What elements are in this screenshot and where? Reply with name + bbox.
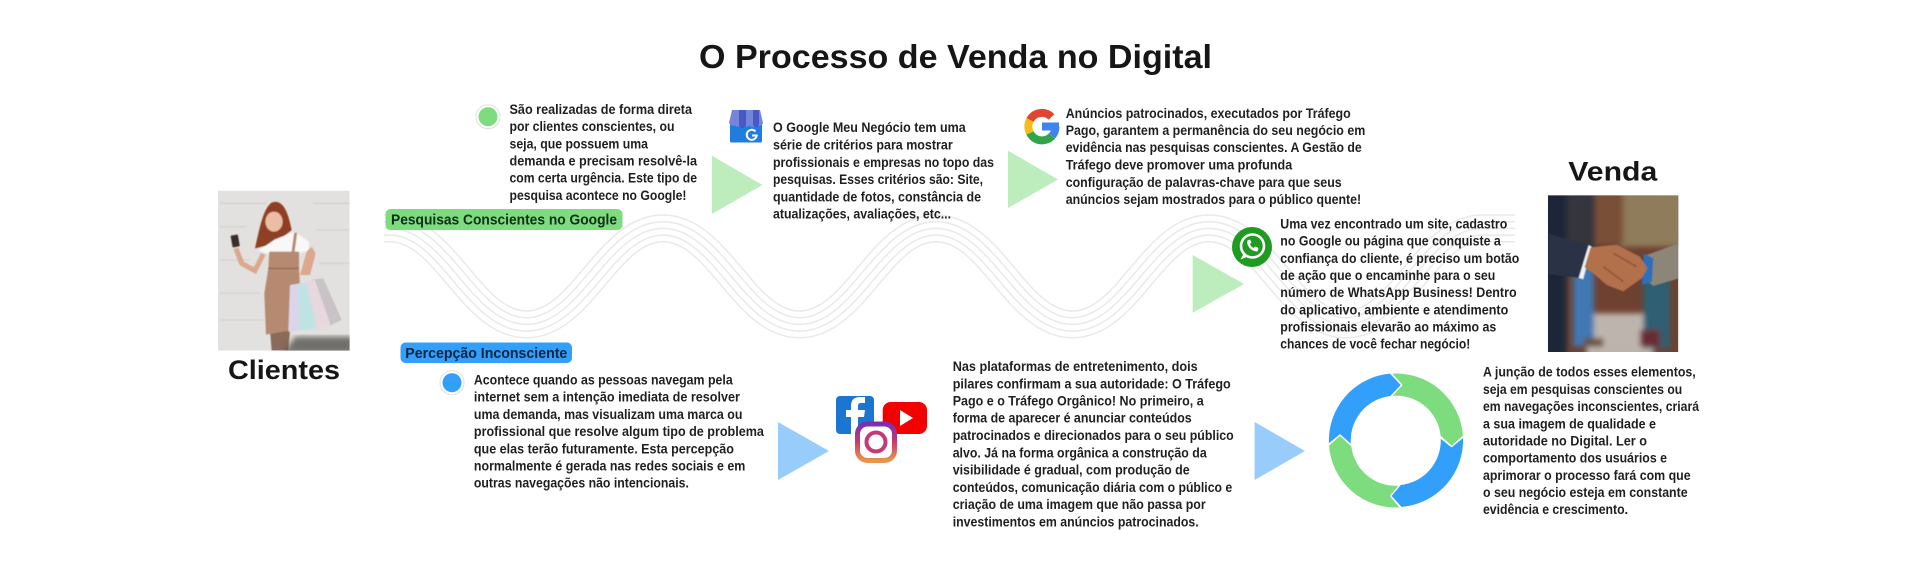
text: conclusion: em navegações inconscientes, criará bbox=[1483, 399, 1699, 414]
photo: handshake bbox=[1548, 195, 1678, 352]
text: entertainment platforms: criação de uma imagem que não passa por bbox=[953, 497, 1206, 512]
text: conclusion: a sua imagem de qualidade e bbox=[1483, 416, 1656, 431]
text: Google My Business: profissionais e empresas no topo das bbox=[773, 155, 994, 170]
text: direct searches: pesquisa acontece no Google! bbox=[510, 188, 686, 203]
text: Google My Business bbox=[773, 120, 994, 222]
text: conclusion: o seu negócio esteja em constante bbox=[1483, 485, 1688, 500]
text: conclusion bbox=[1483, 365, 1699, 517]
text: entertainment platforms: alvo. Já na forma orgânica a construção da bbox=[953, 445, 1207, 460]
text: entertainment platforms: visibilidade é gradual, com produção de bbox=[953, 462, 1190, 478]
text: paid ads bbox=[1066, 106, 1365, 207]
text: WhatsApp: confiança do cliente, é preciso um botão bbox=[1280, 251, 1519, 266]
text: direct searches: por clientes conscientes, ou bbox=[510, 119, 674, 134]
text: WhatsApp: número de WhatsApp Business! Dentro bbox=[1280, 285, 1517, 300]
text: direct searches: seja, que possuem uma bbox=[510, 136, 648, 151]
text: entertainment platforms: patrocinados e direcionados para o seu público bbox=[953, 428, 1234, 443]
text: direct searches: São realizadas de forma direta bbox=[510, 102, 692, 117]
text: paid ads: Anúncios patrocinados, executados por Tráfego bbox=[1066, 106, 1351, 121]
photo: customer woman with shopping bags bbox=[218, 191, 353, 353]
arrow: green triangle 3 bbox=[1193, 255, 1244, 313]
text: Google My Business: atualizações, avaliações, etc... bbox=[773, 206, 951, 222]
arrow: green triangle 2 bbox=[1008, 151, 1058, 208]
wave background lines bbox=[384, 215, 1515, 338]
text: unconscious perception: Acontece quando as pessoas navegam pela bbox=[474, 373, 733, 388]
text: paid ads: evidência nas pesquisas conscientes. A Gestão de bbox=[1066, 140, 1362, 155]
text: Google My Business: série de critérios para mostrar bbox=[773, 138, 953, 152]
text: paid ads: anúncios sejam mostrados para o público quente! bbox=[1066, 192, 1361, 207]
text: unconscious perception: que elas terão futuramente. Esta percepção bbox=[474, 441, 734, 456]
text: unconscious perception: normalmente é gerada nas redes sociais e em bbox=[474, 458, 745, 473]
text: unconscious perception: uma demanda, mas visualizam uma marca ou bbox=[474, 407, 742, 422]
text: WhatsApp: chances de você fechar negócio! bbox=[1280, 337, 1470, 352]
text: conclusion: autoridade no Digital. Ler o bbox=[1483, 433, 1647, 448]
text: Google My Business: O Google Meu Negócio tem uma bbox=[773, 120, 966, 135]
icon: Facebook bbox=[836, 396, 874, 434]
badge: Pesquisas Conscientes no Google: Pesquisas Conscientes no Google bbox=[391, 212, 617, 228]
text: paid ads: Pago, garantem a permanência do seu negócio em bbox=[1066, 123, 1365, 138]
text: WhatsApp: do aplicativo, ambiente e atendimento bbox=[1280, 302, 1508, 317]
icon: YouTube bbox=[883, 402, 927, 434]
icon: green bullet bbox=[476, 105, 500, 129]
text: unconscious perception: profissional que resolve algum tipo de problema bbox=[474, 424, 764, 439]
icon: social networks bbox=[836, 396, 927, 460]
text: WhatsApp: no Google ou página que conquiste a bbox=[1280, 234, 1501, 249]
icon: Google G bbox=[1028, 113, 1059, 140]
text: conclusion: seja em pesquisas conscientes ou bbox=[1483, 382, 1682, 397]
infographic canvas bbox=[218, 44, 1700, 530]
text: unconscious perception: outras navegações não intencionais. bbox=[474, 476, 689, 491]
arrow: blue triangle 1 bbox=[778, 422, 829, 480]
icon: blue bullet bbox=[440, 371, 464, 395]
text: conclusion: comportamento dos usuários e bbox=[1483, 451, 1667, 466]
text: unconscious perception bbox=[474, 373, 764, 491]
text: direct searches: demanda e precisam resolvê-la bbox=[510, 154, 697, 168]
text: entertainment platforms: investimentos em anúncios patrocinados. bbox=[953, 514, 1199, 529]
text: entertainment platforms: conteúdos, comunicação diária com o público e bbox=[953, 480, 1233, 495]
icon: WhatsApp bbox=[1232, 227, 1272, 267]
text: conclusion: aprimorar o processo fará com que bbox=[1483, 468, 1691, 483]
text: entertainment platforms: forma de aparecer é anunciar conteúdos bbox=[953, 411, 1192, 426]
text: direct searches: com certa urgência. Este tipo de bbox=[510, 171, 697, 186]
text: conclusion: evidência e crescimento. bbox=[1483, 502, 1628, 517]
text: WhatsApp bbox=[1280, 216, 1519, 352]
heading: Clientes: Clientes bbox=[228, 355, 340, 385]
badge: Percepção Inconsciente: Percepção Inconsciente bbox=[405, 345, 567, 362]
text: unconscious perception: internet sem a intenção imediata de resolver bbox=[474, 390, 741, 405]
text: Google My Business: pesquisas. Esses critérios são: Site, bbox=[773, 172, 983, 187]
text: entertainment platforms: Nas plataformas de entretenimento, dois bbox=[953, 359, 1198, 374]
text: entertainment platforms bbox=[953, 359, 1234, 529]
title: O Processo de Venda no Digital bbox=[699, 38, 1212, 75]
text: paid ads: configuração de palavras-chave para que seus bbox=[1066, 175, 1342, 190]
text: WhatsApp: profissionais elevarão ao máximo as bbox=[1280, 320, 1496, 335]
text: WhatsApp: de ação que o encaminhe para o seu bbox=[1280, 268, 1495, 283]
arrow: green triangle 1 bbox=[712, 156, 762, 214]
icon: Google My Business bbox=[729, 110, 763, 142]
chart: circular cycle arrows bbox=[1328, 373, 1464, 508]
text: conclusion: A junção de todos esses elementos, bbox=[1483, 365, 1696, 380]
arrow: blue triangle 2 bbox=[1255, 422, 1305, 480]
text: Google My Business: quantidade de fotos, constância de bbox=[773, 189, 981, 204]
text: WhatsApp: Uma vez encontrado um site, cadastro bbox=[1280, 216, 1507, 231]
icon: Instagram bbox=[858, 424, 894, 460]
text: direct searches bbox=[510, 102, 697, 203]
text: entertainment platforms: pilares confirmam a sua autoridade: O Tráfego bbox=[953, 376, 1231, 391]
heading: Venda: Venda bbox=[1568, 157, 1658, 187]
text: paid ads: Tráfego deve promover uma profunda bbox=[1066, 158, 1293, 172]
text: entertainment platforms: Pago e o Tráfego Orgânico! No primeiro, a bbox=[953, 394, 1204, 408]
